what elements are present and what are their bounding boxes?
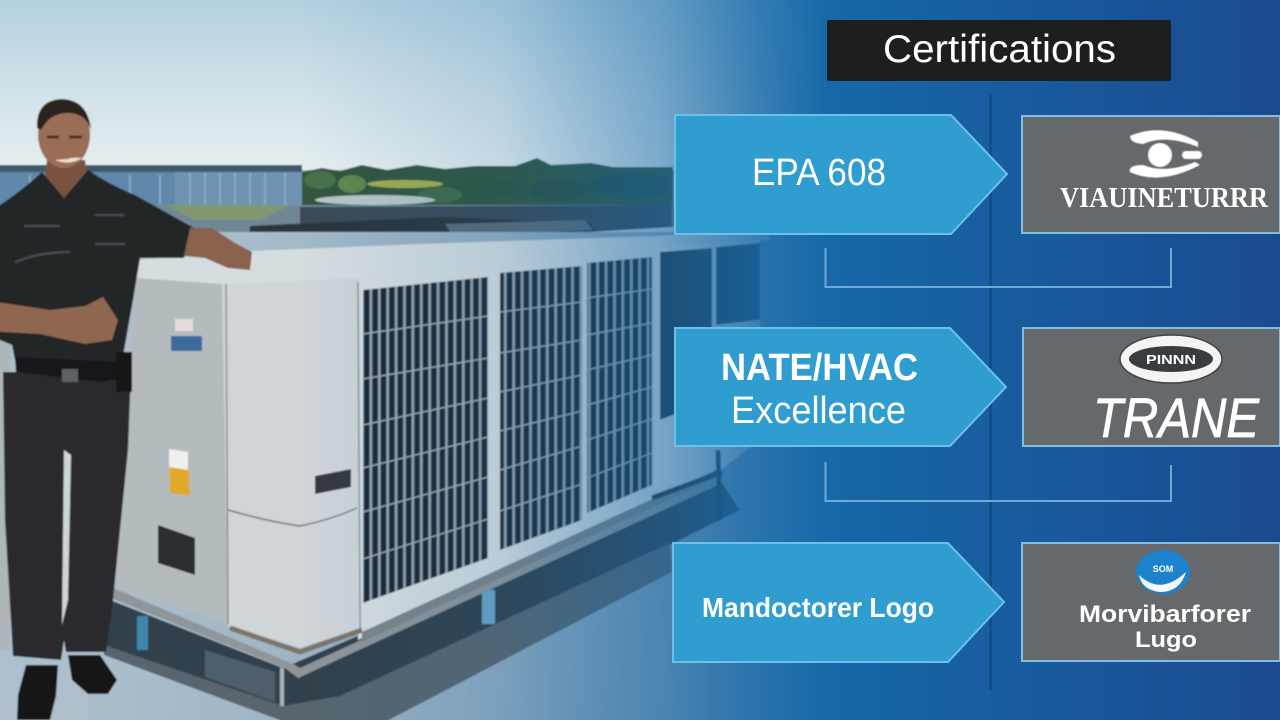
- unit top lid: [135, 232, 770, 286]
- head: [38, 102, 90, 168]
- arrow: manufacturer logo: Mandoctorer Logo: [702, 592, 934, 623]
- icon: blue round logo: SOM: [1153, 564, 1173, 574]
- bracket connector 1: [826, 248, 1171, 287]
- logo text: VIAUINETURRR: [1060, 183, 1269, 214]
- roof floor: [0, 232, 1280, 720]
- icon: oval badge: [1120, 335, 1222, 383]
- eyes: [47, 136, 82, 138]
- logo card 3: [1022, 543, 1280, 661]
- rooftops in the distance: [0, 205, 1010, 252]
- shirt: [0, 170, 194, 362]
- vent and handle: [158, 469, 351, 575]
- arrow: EPA 608: [675, 115, 1007, 234]
- shirt pocket detail: [15, 215, 125, 262]
- bracket connector 2: [826, 462, 1171, 501]
- hair: [37, 99, 91, 130]
- unit left face: [113, 278, 228, 624]
- condenser grille 2: [500, 266, 582, 550]
- distant building: [0, 165, 302, 206]
- condenser grille 1: [363, 277, 488, 603]
- logo card 1: [1022, 116, 1280, 233]
- arrow: EPA 608: EPA 608: [752, 152, 886, 194]
- HVAC unit: [111, 232, 770, 678]
- logo card 2: [1023, 328, 1280, 449]
- heading: Certifications: [827, 20, 1171, 81]
- neck: [44, 160, 88, 198]
- arrow: NATE/HVAC Excellence: Excellence: [731, 390, 906, 432]
- row 1: EPA 608: [675, 115, 1280, 234]
- arrow: NATE/HVAC Excellence: [675, 328, 1006, 446]
- curb and shadow under unit: [104, 480, 740, 720]
- icon: oval badge: PINNN: [1146, 352, 1196, 367]
- arm on unit: [184, 228, 252, 270]
- condenser grille 3: [587, 257, 652, 513]
- frame post and bracket: [652, 450, 722, 520]
- row 3: Manufacturer Logo: [673, 543, 1280, 662]
- unit corner panel: [222, 278, 362, 648]
- blue sticker: [171, 319, 202, 351]
- faded grilles: [660, 243, 760, 420]
- icon: abstract eye logo: [1130, 130, 1202, 178]
- tree line: [302, 158, 673, 212]
- warning label: [169, 449, 190, 496]
- base rail: [111, 468, 720, 678]
- arrow: NATE/HVAC Excellence: NATE/HVAC: [721, 347, 918, 389]
- arrow: manufacturer logo: [673, 543, 1004, 662]
- panel seam: [228, 508, 357, 526]
- icon: blue round logo: [1136, 550, 1190, 594]
- logo text: Morvibarforer: [1079, 601, 1251, 628]
- unit right face: [358, 236, 760, 640]
- shoes: [17, 655, 117, 720]
- row 2: NATE/HVAC Excellence: [675, 328, 1280, 449]
- trousers: [3, 372, 131, 660]
- sky: [0, 0, 1280, 170]
- smile: [55, 158, 82, 163]
- technician: [0, 99, 252, 720]
- strip left of technician: [0, 330, 10, 650]
- central vertical line: [989, 95, 992, 690]
- heading: Certifications: Certifications: [883, 28, 1116, 71]
- belt: [15, 352, 132, 392]
- logo text: TRANE: TRANE: [1093, 386, 1260, 449]
- folded arm: [0, 297, 118, 344]
- logo card 3: Lugo: [1135, 627, 1197, 652]
